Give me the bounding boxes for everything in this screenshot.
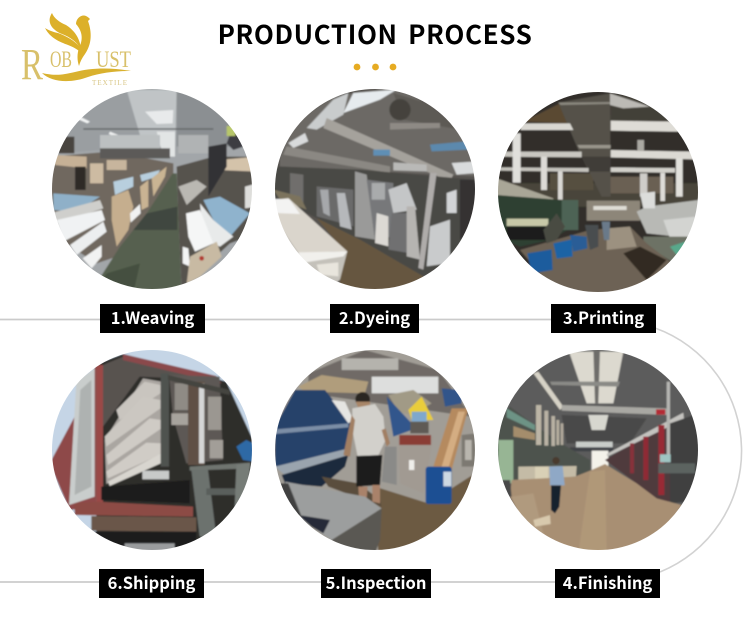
label: 3.Printing: 3.Printing bbox=[563, 305, 644, 329]
blue barrels bbox=[527, 249, 553, 273]
floor bbox=[317, 218, 423, 293]
icon: gold bird bbox=[45, 13, 91, 66]
blue fabric bbox=[275, 390, 352, 467]
floor bbox=[375, 473, 475, 553]
machine row bbox=[273, 166, 473, 276]
label: 6.Shipping: 6.Shipping bbox=[108, 570, 195, 594]
photo: finishing hall bbox=[498, 350, 698, 550]
floor aisle bbox=[90, 173, 182, 293]
left loom row bbox=[50, 152, 173, 263]
label: 1.Weaving: 1.Weaving bbox=[111, 305, 194, 329]
logo wordmark bbox=[21, 40, 131, 89]
photo: weaving looms bbox=[52, 89, 252, 289]
skylight bbox=[569, 352, 623, 403]
decorative title dots bbox=[354, 64, 396, 70]
steel machine bbox=[398, 435, 433, 493]
ceiling duct bbox=[558, 93, 611, 197]
worker bbox=[343, 392, 390, 503]
worker bbox=[549, 457, 565, 513]
fabric rolls bbox=[105, 378, 161, 484]
floor bbox=[510, 464, 682, 553]
logo wordmark: R bbox=[21, 40, 43, 88]
photo: printing hall bbox=[498, 92, 698, 292]
label: 1.Weaving bbox=[100, 304, 205, 333]
right red stenter bbox=[605, 413, 683, 503]
metal table bbox=[285, 482, 382, 540]
forklift mast bbox=[161, 373, 169, 467]
label: 5.Inspection: 5.Inspection bbox=[326, 570, 426, 594]
green machine left bbox=[497, 178, 553, 200]
truck bed bbox=[75, 502, 193, 517]
left machinery bbox=[497, 407, 590, 497]
photo: shipping container bbox=[52, 350, 252, 550]
white beams bbox=[521, 123, 573, 130]
label: 4.Finishing: 4.Finishing bbox=[563, 570, 652, 594]
title: PRODUCTION PROCESS bbox=[218, 15, 532, 52]
right loom row bbox=[177, 157, 257, 290]
label: 2.Dyeing: 2.Dyeing bbox=[339, 305, 410, 329]
label: 3.Printing bbox=[551, 304, 656, 333]
back of hall bbox=[587, 201, 640, 221]
floor bbox=[520, 227, 677, 293]
container door bbox=[69, 368, 95, 505]
forklift body bbox=[190, 463, 250, 471]
photo: dyeing machines bbox=[275, 89, 475, 289]
logo wordmark: TEXTILE bbox=[92, 79, 127, 87]
logo wordmark: OB bbox=[50, 47, 72, 72]
photo: fabric inspection bbox=[275, 350, 475, 550]
blue barrel and tubes bbox=[433, 408, 468, 470]
label: 2.Dyeing bbox=[330, 304, 419, 333]
logo swoosh bbox=[42, 68, 131, 81]
logo: Robust Textile gold bird bbox=[21, 13, 131, 88]
grey machine right bbox=[637, 200, 698, 237]
white tub bbox=[272, 198, 347, 253]
label: 6.Shipping bbox=[99, 569, 204, 598]
